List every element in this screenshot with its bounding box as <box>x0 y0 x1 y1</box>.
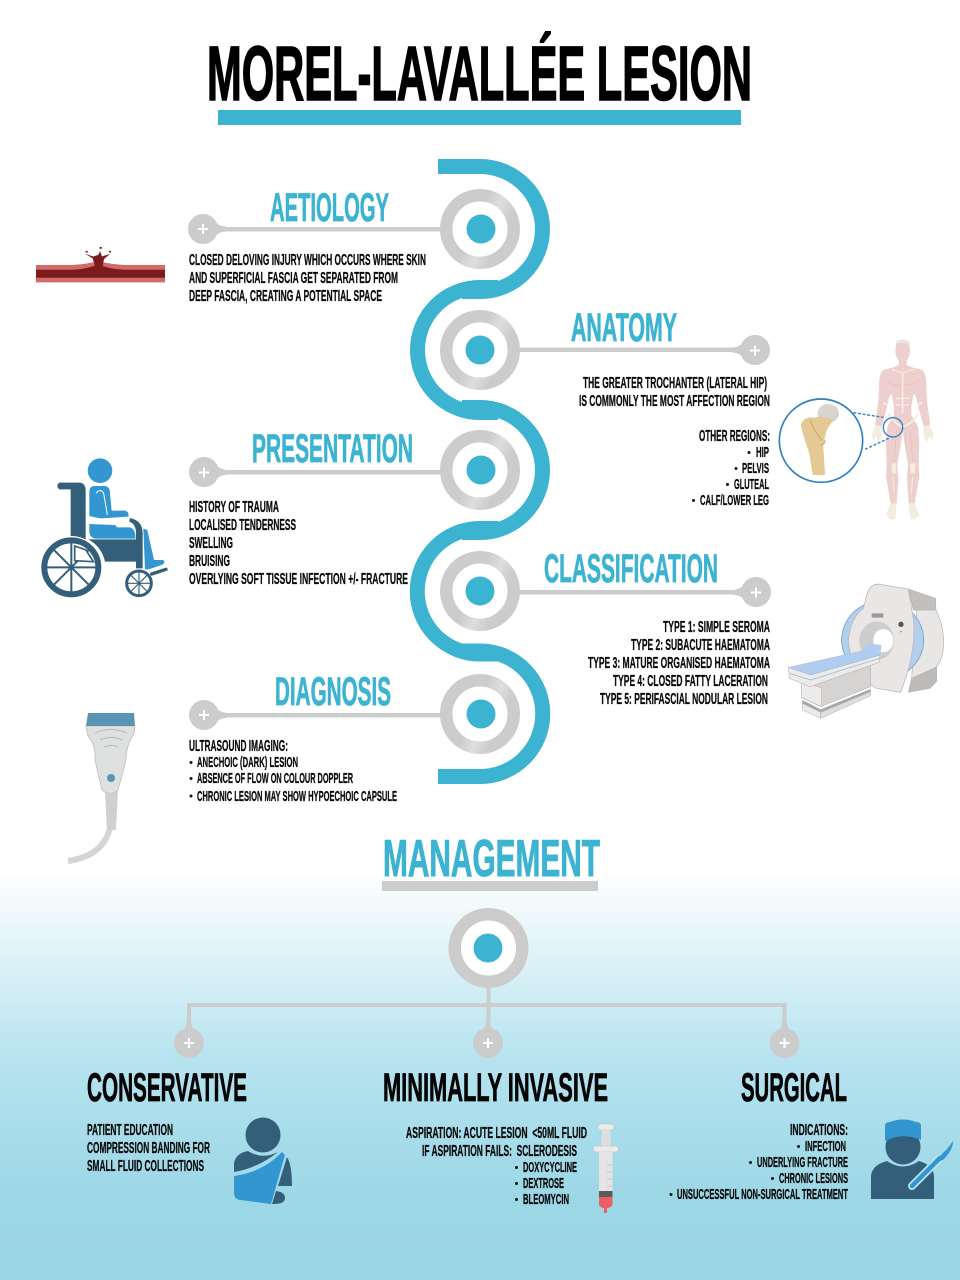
text: presentation: OVERLYING SOFT TISSUE INFECTION +/- FRACTURE <box>189 571 408 588</box>
text: conservative: COMPRESSION BANDING FOR <box>87 1140 210 1157</box>
text: classification <box>588 619 770 708</box>
panel: surgical <box>670 1066 953 1203</box>
text: conservative: SMALL FLUID COLLECTIONS <box>87 1158 204 1175</box>
text: anatomy: GLUTEAL <box>734 477 769 493</box>
text: classification: TYPE 3: MATURE ORGANISED HAEMATOMA <box>588 655 770 672</box>
node: aetiology <box>446 195 514 263</box>
heading: management: MANAGEMENT <box>383 830 600 888</box>
icon: human muscular figure with femur callout <box>779 339 934 519</box>
node: diagnosis <box>446 680 514 748</box>
icon: ultrasound probe <box>68 713 135 861</box>
text: anatomy: PELVIS <box>742 461 769 477</box>
text: anatomy: OTHER REGIONS: <box>699 428 770 445</box>
node: classification <box>446 557 514 625</box>
text: diagnosis: ABSENCE OF FLOW ON COLOUR DOPPLER <box>197 771 353 787</box>
panel: minimally invasive <box>383 1066 618 1213</box>
icon: MRI scanner <box>788 584 944 718</box>
text: anatomy: IS COMMONLY THE MOST AFFECTION REGION <box>579 393 770 410</box>
text: diagnosis: ANECHOIC (DARK) LESION <box>197 755 298 771</box>
text: aetiology: AND SUPERFICIAL FASCIA GET SEPARATED FROM <box>189 270 398 287</box>
text: surgical: CHRONIC LESIONS <box>779 1171 848 1187</box>
text: minimally invasive <box>406 1125 587 1208</box>
connector: anatomy <box>518 335 770 365</box>
text: minimally invasive: DOXYCYCLINE <box>523 1160 577 1176</box>
heading: aetiology: AETIOLOGY <box>270 186 389 230</box>
text: minimally invasive: ASPIRATION: ACUTE LESION <50ML FLUID <box>406 1125 587 1142</box>
connector: classification <box>518 577 771 607</box>
heading: presentation: PRESENTATION <box>252 427 413 471</box>
node: presentation <box>446 436 514 504</box>
text: conservative: PATIENT EDUCATION <box>87 1122 173 1139</box>
text: diagnosis <box>189 738 397 805</box>
icon: surgeon with scalpel <box>871 1120 953 1199</box>
connector: presentation <box>189 457 442 487</box>
heading: anatomy: ANATOMY <box>571 306 677 350</box>
heading: surgical: SURGICAL <box>741 1066 847 1110</box>
background gradient panel <box>0 872 960 1280</box>
heading: conservative: CONSERVATIVE <box>87 1066 247 1110</box>
text: minimally invasive: IF ASPIRATION FAILS: SCLERODESIS <box>422 1143 577 1160</box>
heading underline <box>382 881 598 891</box>
text: surgical: INFECTION <box>805 1139 846 1155</box>
panel: aetiology <box>36 186 514 305</box>
heading: minimally invasive: MINIMALLY INVASIVE <box>383 1066 608 1110</box>
text: classification: TYPE 2: SUBACUTE HAEMATOMA <box>631 637 770 654</box>
panel: presentation <box>40 427 514 599</box>
text: presentation: SWELLING <box>189 535 233 552</box>
icon: syringe <box>593 1124 618 1213</box>
text: minimally invasive: BLEOMYCIN <box>523 1192 569 1208</box>
tree connector <box>174 985 800 1058</box>
text: surgical: INDICATIONS: <box>790 1122 848 1139</box>
node: management <box>455 914 522 982</box>
title underline <box>218 110 741 125</box>
panel: diagnosis <box>68 670 514 861</box>
panel: management <box>174 830 800 1058</box>
text: diagnosis: ULTRASOUND IMAGING: <box>189 738 288 755</box>
text: presentation: BRUISING <box>189 553 230 570</box>
heading: classification: CLASSIFICATION <box>544 547 718 591</box>
icon: wheelchair <box>40 458 166 599</box>
text: presentation <box>189 499 408 588</box>
text: anatomy: HIP <box>756 445 769 461</box>
text: aetiology <box>189 252 426 305</box>
text: presentation: HISTORY OF TRAUMA <box>189 499 279 516</box>
connector: aetiology <box>188 214 442 244</box>
icon: arm sling <box>234 1118 292 1204</box>
panel: classification <box>446 547 944 718</box>
text: classification: TYPE 1: SIMPLE SEROMA <box>663 619 770 636</box>
serpentine connector <box>417 166 543 776</box>
text: classification: TYPE 5: PERIFASCIAL NODULAR LESION <box>600 691 768 708</box>
text: presentation: LOCALISED TENDERNESS <box>189 517 296 534</box>
heading: diagnosis: DIAGNOSIS <box>275 670 391 714</box>
text: anatomy: THE GREATER TROCHANTER (LATERAL HIP) <box>583 375 767 392</box>
text: aetiology: DEEP FASCIA, CREATING A POTENTIAL SPACE <box>189 288 382 305</box>
node: anatomy <box>446 316 514 384</box>
text: surgical <box>670 1122 848 1203</box>
connector: diagnosis <box>189 700 442 730</box>
text: minimally invasive: DEXTROSE <box>523 1176 564 1192</box>
text: conservative <box>87 1122 210 1175</box>
icon: skin wound <box>36 247 165 282</box>
panel: conservative <box>87 1066 292 1204</box>
text: anatomy <box>579 375 770 509</box>
text: diagnosis: CHRONIC LESION MAY SHOW HYPOECHOIC CAPSULE <box>197 789 397 805</box>
text: anatomy: CALF/LOWER LEG <box>700 493 769 509</box>
text: classification: TYPE 4: CLOSED FATTY LACERATION <box>613 673 768 690</box>
text: aetiology: CLOSED DELOVING INJURY WHICH OCCURS WHERE SKIN <box>189 252 426 269</box>
text: surgical: UNDERLYING FRACTURE <box>757 1155 848 1171</box>
panel: anatomy <box>446 306 934 519</box>
